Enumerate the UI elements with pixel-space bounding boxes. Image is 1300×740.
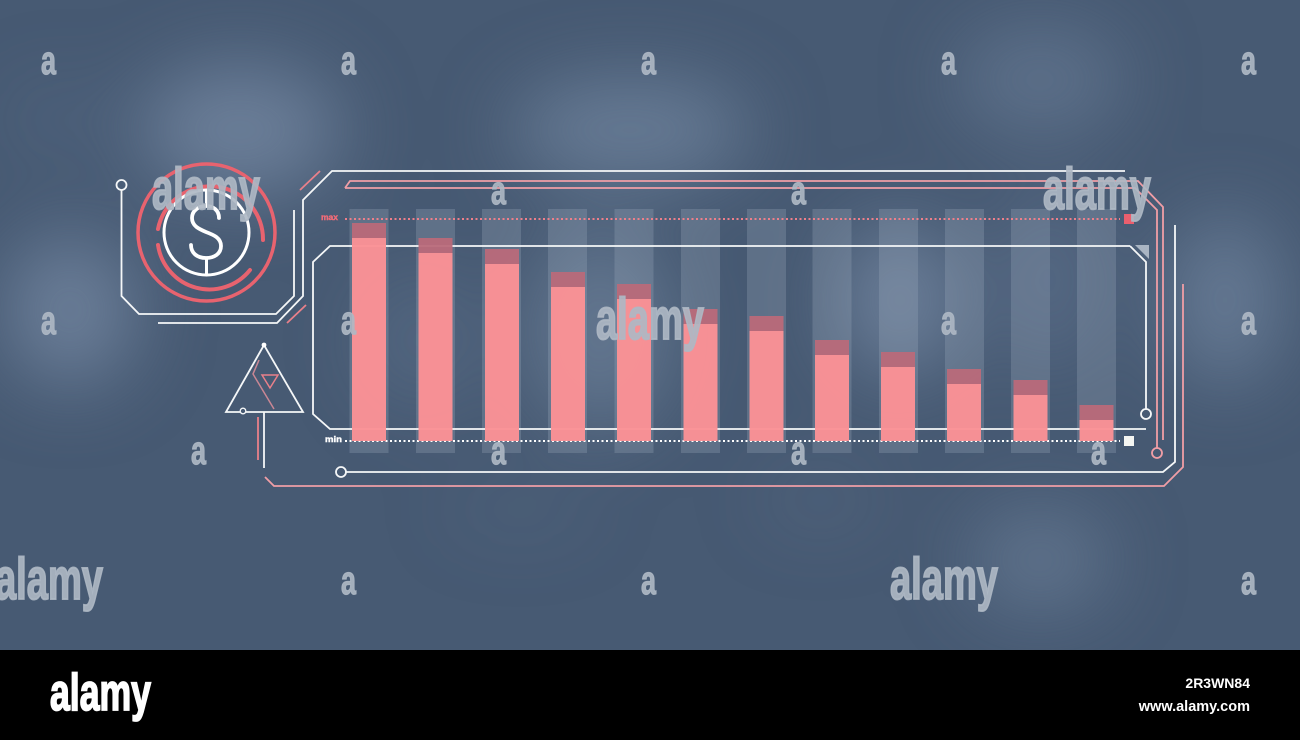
- footer logo: alamy: [50, 664, 151, 722]
- watermarks: a: [641, 559, 657, 603]
- watermarks: alamy: [1043, 157, 1151, 222]
- watermarks: a: [41, 299, 57, 343]
- watermarks: a: [191, 429, 207, 473]
- pink lower frame: [265, 284, 1183, 486]
- outer circuit frame: [158, 171, 1183, 486]
- min marker: [1124, 436, 1134, 446]
- watermarks: alamy: [890, 547, 998, 612]
- pink end node: [1152, 448, 1162, 458]
- watermarks: alamy: [596, 287, 704, 352]
- watermarks: alamy: [152, 157, 260, 222]
- footer bar: [0, 650, 1300, 740]
- watermarks: a: [641, 39, 657, 83]
- icon: dollar coin: [138, 164, 275, 301]
- white lower frame: [346, 225, 1175, 472]
- watermarks: a: [1241, 299, 1257, 343]
- max label: max: [321, 213, 339, 222]
- min line: [345, 440, 1120, 442]
- icon: warning triangle: [226, 343, 303, 468]
- white end node: [336, 467, 346, 477]
- bar chart: [313, 209, 1151, 453]
- watermarks: a: [41, 39, 57, 83]
- watermarks: a: [1241, 39, 1257, 83]
- watermarks: a: [491, 429, 507, 473]
- min label: min: [325, 435, 342, 444]
- watermarks: a: [1241, 559, 1257, 603]
- watermarks: a: [491, 169, 507, 213]
- pink accent bottom: [287, 305, 306, 323]
- pink top frame: [345, 181, 1163, 448]
- watermarks: a: [1091, 429, 1107, 473]
- watermarks: a: [341, 299, 357, 343]
- bars: [352, 238, 1114, 441]
- watermarks: a: [341, 39, 357, 83]
- inner frame: [313, 246, 1146, 429]
- white top frame: [158, 171, 1125, 323]
- icon panel frame: [116, 180, 294, 314]
- website: www.alamy.com: [1138, 699, 1250, 715]
- pink accent top: [300, 171, 320, 190]
- frame end node: [1141, 409, 1151, 419]
- image id: 2R3WN84: [1185, 675, 1250, 691]
- bar tops: [352, 223, 1114, 420]
- watermarks: a: [941, 299, 957, 343]
- max marker: [1124, 214, 1134, 224]
- watermarks: a: [791, 429, 807, 473]
- watermarks: [0, 39, 1257, 612]
- watermarks: a: [941, 39, 957, 83]
- max line: [345, 218, 1120, 220]
- corner marker: [1135, 245, 1149, 259]
- watermarks: a: [791, 169, 807, 213]
- background columns: [350, 209, 1116, 453]
- watermarks: a: [341, 559, 357, 603]
